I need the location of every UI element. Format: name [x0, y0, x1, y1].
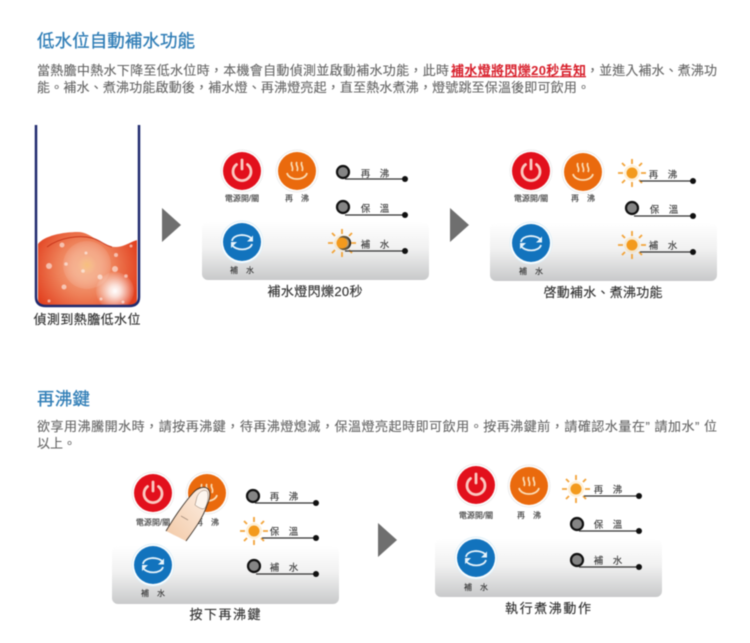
indicator: reboil lit	[618, 159, 696, 187]
panel: start refill and boil: 電源開/關	[514, 194, 548, 203]
indicator: reboil off	[337, 166, 408, 182]
caption: refill lamp flashes 20 seconds: 補水燈閃爍20秒	[268, 284, 362, 299]
text block: reboil description	[37, 419, 717, 451]
indicator: keep warm lit: 保 溫	[270, 526, 299, 538]
panel: press reboil key	[112, 472, 339, 604]
icon: refill button	[132, 544, 174, 586]
indicator: reboil lit: 再 沸	[594, 484, 622, 496]
panel: refill lamp flashing	[202, 150, 429, 280]
text block: reboil description: 以上。	[37, 436, 76, 451]
arrow 2	[450, 208, 469, 242]
icon: finger pressing	[166, 487, 210, 541]
caption: start refill and boil: 啓動補水、煮沸功能	[544, 285, 662, 300]
panel: start refill and boil: 補 水	[519, 266, 543, 276]
indicator: reboil lit: 再 沸	[649, 169, 677, 181]
panel: refill lamp flashing: 電源開/關	[225, 194, 259, 203]
icon: reboil button	[276, 150, 318, 192]
water	[38, 232, 137, 305]
icon: power button	[221, 150, 263, 192]
icon: reboil button	[562, 151, 604, 193]
indicator: keep warm off: 保 溫	[650, 204, 679, 216]
icon: reboil button	[508, 465, 550, 507]
panel: refill lamp flashing: 補 水	[230, 265, 254, 275]
text block: low water description: 補水燈將閃爍20秒告知	[451, 63, 586, 78]
indicator: reboil off: 再 沸	[270, 491, 298, 503]
beaker illustration	[36, 125, 139, 310]
indicator: refill flashing	[328, 229, 408, 257]
indicator: keep warm off	[626, 202, 696, 219]
icon: power button	[510, 150, 552, 192]
heading: low water level: 低水位自動補水功能	[37, 31, 195, 51]
indicator: refill off: 補 水	[594, 555, 623, 567]
indicator: reboil off: 再 沸	[361, 168, 389, 180]
indicator: keep warm off: 保 溫	[594, 519, 623, 531]
caption: low water detected: 偵測到熱膽低水位	[34, 312, 140, 327]
indicator: keep warm off: 保 溫	[361, 203, 390, 215]
arrow 3	[378, 523, 397, 557]
icon: refill button	[510, 222, 552, 264]
heading: reboil key: 再沸鍵	[37, 389, 90, 409]
text block: reboil description: 欲享用沸騰開水時，請按再沸鍵，待再沸燈熄滅，保溫燈亮起時即可飲用。按再沸鍵前，請確認水量在” 請加水” 位	[37, 419, 717, 434]
panel: perform boil	[435, 464, 662, 597]
panel: perform boil: 補 水	[464, 582, 488, 592]
caption: perform boil: 執行煮沸動作	[505, 601, 591, 616]
indicator: refill lit	[618, 231, 696, 259]
indicator: keep warm lit	[240, 517, 319, 545]
icon: refill button	[455, 537, 497, 579]
panel: press reboil key: 再 沸	[195, 517, 219, 527]
arrow 1	[162, 208, 181, 242]
panel: press reboil key: 電源開/關	[136, 518, 170, 527]
indicator: keep warm off	[337, 201, 408, 218]
icon: refill button	[221, 221, 263, 263]
indicator: refill off: 補 水	[270, 562, 299, 574]
panel: start refill and boil: 再 沸	[571, 193, 595, 203]
indicator: refill flashing: 補 水	[361, 239, 390, 251]
glass outline	[36, 125, 139, 306]
text block: low water description: 能。補水、煮沸功能啟動後，補水燈、再沸燈亮起，直至熱水煮沸，燈號跳至保溫後即可飲用。	[37, 80, 590, 95]
panel: start refill and boil	[490, 150, 717, 281]
text block: low water description	[37, 63, 717, 95]
text block: low water description: 當熱膽中熱水下降至低水位時，本機會自動偵測並啟動補水功能，此時	[37, 63, 449, 78]
panel: refill lamp flashing: 再 沸	[285, 193, 309, 203]
text block: low water description: ，並進入補水、煮沸功	[586, 63, 717, 78]
indicator: refill off	[571, 554, 642, 570]
panel: perform boil: 電源開/關	[459, 511, 493, 520]
indicator: refill off	[248, 560, 319, 577]
icon: reboil button	[186, 472, 228, 514]
indicator: keep warm off	[571, 518, 642, 534]
indicator: reboil off	[247, 490, 319, 506]
panel: press reboil key: 補 水	[141, 588, 165, 598]
icon: power button	[455, 464, 497, 506]
icon: power button	[132, 472, 174, 514]
bubbles	[46, 242, 132, 304]
indicator: refill lit: 補 水	[649, 240, 678, 252]
panel: perform boil: 再 沸	[517, 510, 541, 520]
indicator: reboil lit	[562, 475, 642, 503]
caption: press reboil key: 按下再沸鍵	[190, 607, 260, 622]
